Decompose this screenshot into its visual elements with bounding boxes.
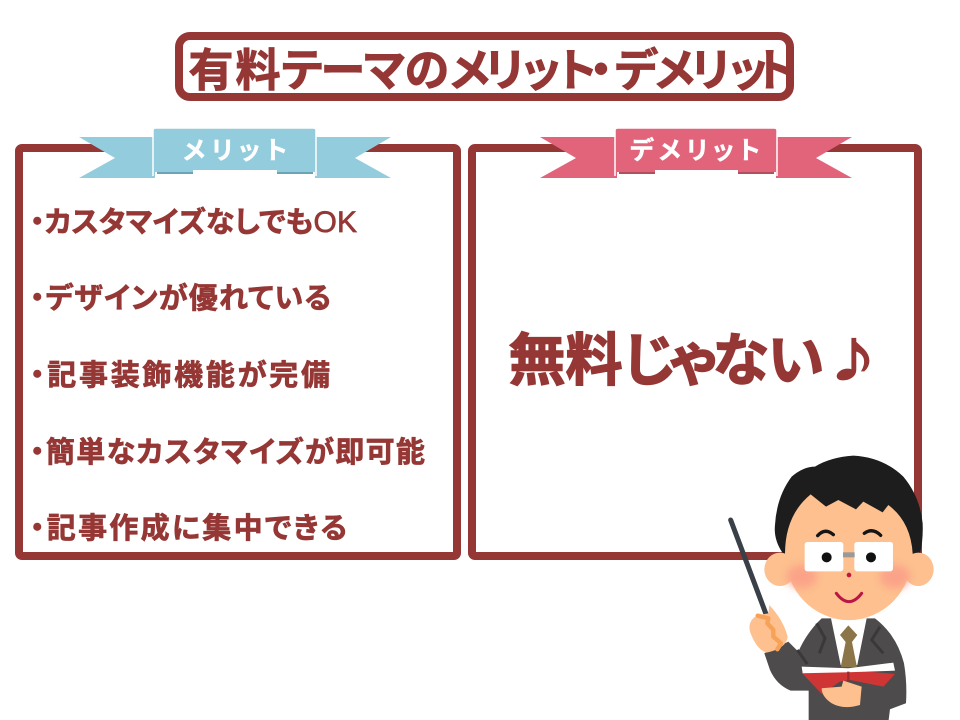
pointer	[731, 520, 766, 614]
lower hand	[822, 681, 862, 707]
ribbon: demerits heading: デメリット	[630, 136, 760, 165]
mouth	[836, 593, 862, 602]
illustration: teacher with pointer and book	[731, 456, 934, 720]
eyebrows	[818, 531, 881, 536]
pointer hand	[749, 605, 788, 653]
hair back	[775, 456, 923, 554]
ribbon: demerits heading	[540, 128, 852, 179]
merit list	[30, 205, 425, 545]
nose	[847, 573, 851, 577]
title: 有料テーマのメリット・デメリット	[188, 45, 798, 96]
face	[785, 494, 913, 620]
demerit text	[508, 313, 879, 398]
merit list: ・簡単なカスタマイズが即可能	[30, 435, 425, 469]
book	[802, 663, 895, 694]
panel: merits	[19, 128, 457, 556]
lapel lines	[797, 623, 883, 664]
demerit text: 無料じゃない	[508, 329, 824, 393]
glasses	[805, 542, 893, 571]
tie	[840, 625, 857, 667]
ribbon: merits heading: メリット	[183, 137, 287, 165]
merit list: ・デザインが優れている	[30, 281, 331, 315]
ribbon: merits heading	[79, 128, 391, 179]
demerit text: ♪	[827, 313, 879, 398]
merit list: ・記事作成に集中できる	[30, 512, 347, 545]
merit list: ・記事装飾機能が完備	[30, 358, 330, 392]
merit list: ・カスタマイズなしでもOK	[30, 205, 357, 239]
shirt	[831, 618, 867, 665]
cheeks	[786, 565, 817, 589]
panel: demerits	[472, 128, 918, 556]
ears	[764, 553, 796, 586]
suit	[764, 618, 906, 720]
